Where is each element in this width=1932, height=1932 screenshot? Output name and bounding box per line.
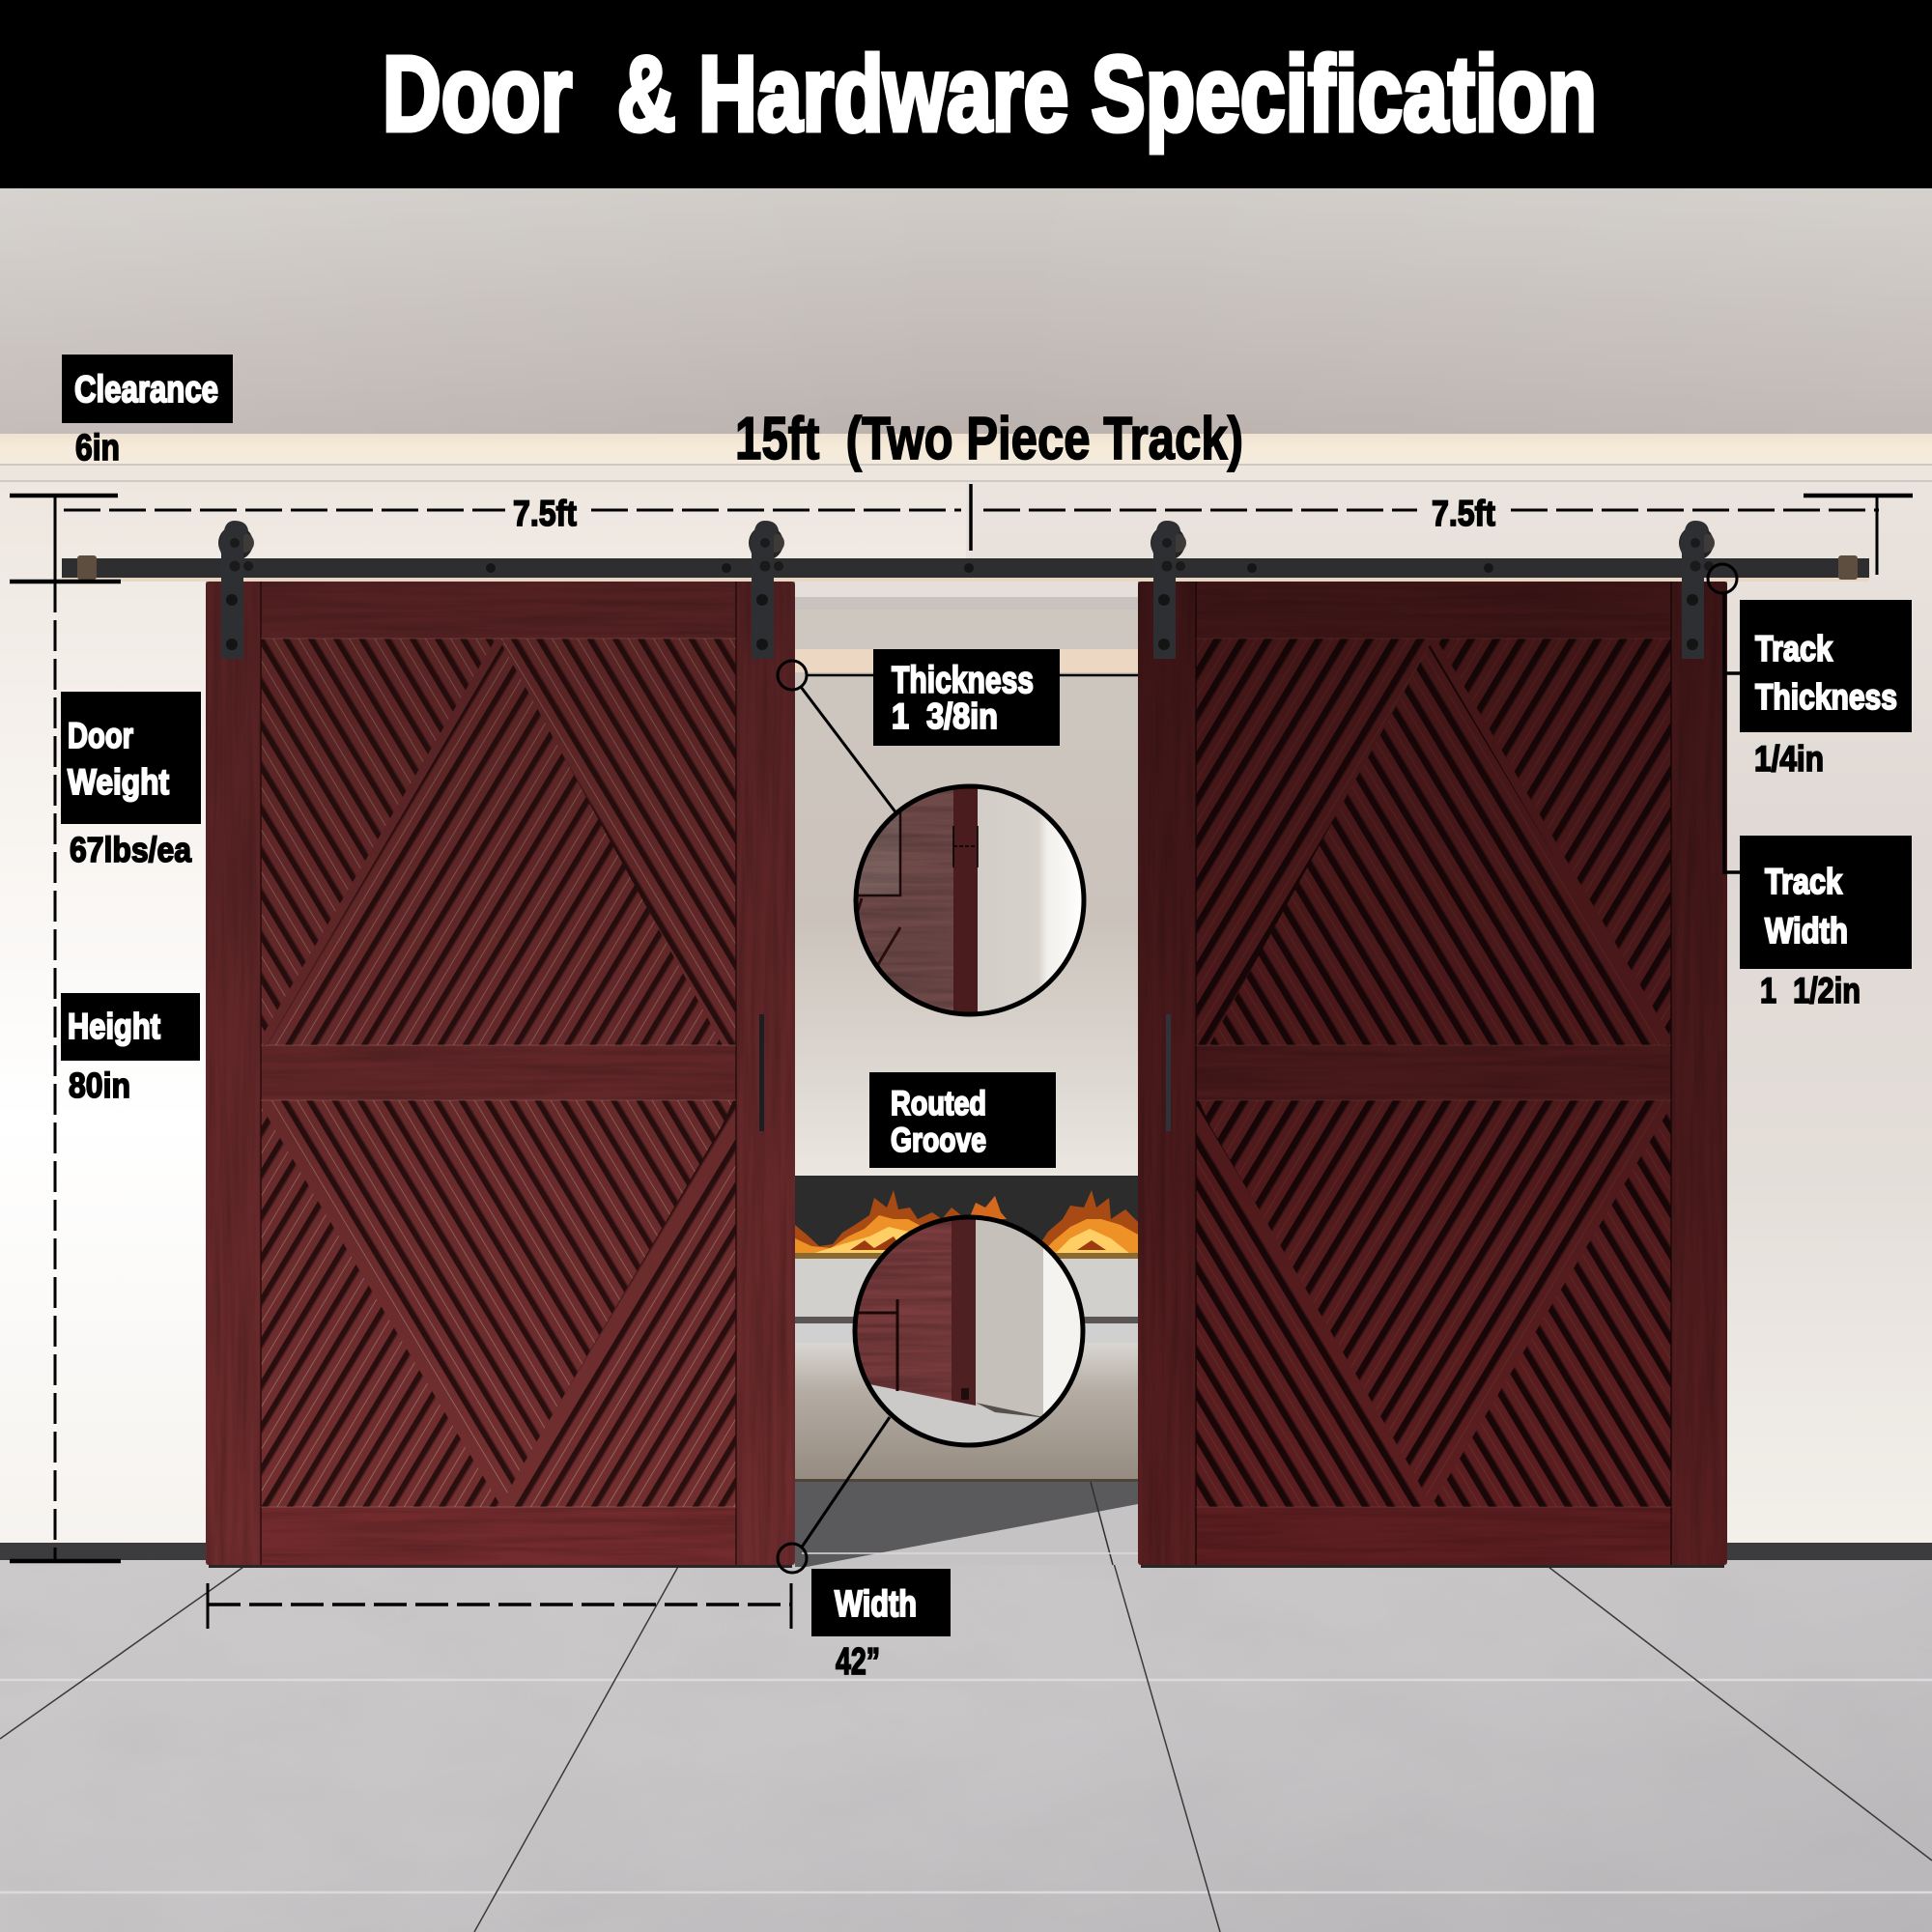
clearance label: Clearance xyxy=(74,369,218,411)
thickness label xyxy=(873,649,1060,746)
stiles xyxy=(206,582,795,1565)
track bolts xyxy=(486,563,1493,573)
clearance label: 6in xyxy=(75,428,120,469)
title bar xyxy=(0,0,1932,188)
track thickness label xyxy=(1740,600,1912,779)
fireplace band xyxy=(795,1176,1138,1259)
door width dimension xyxy=(208,1583,791,1629)
thickness label: 1 3/8in xyxy=(892,696,998,736)
door weight label: Door xyxy=(68,716,133,755)
door weight label: Weight xyxy=(68,762,169,802)
door weight label xyxy=(61,692,201,869)
width callout connector xyxy=(778,1417,890,1573)
track callout connector xyxy=(1708,564,1744,872)
title: Door & Hardware Specification xyxy=(383,35,1597,154)
width label xyxy=(811,1569,951,1683)
barn door track and hardware xyxy=(62,521,1869,659)
hangers xyxy=(218,521,1715,659)
thickness callout connector xyxy=(778,661,1138,813)
right barn door xyxy=(1138,582,1727,1568)
width label: Width xyxy=(835,1584,917,1625)
floor tile joints xyxy=(0,1483,1932,1932)
track stops xyxy=(77,555,1858,580)
track length heading: 15ft (Two Piece Track) xyxy=(735,406,1243,472)
opening between the doors xyxy=(795,578,1138,1567)
height label: 80in xyxy=(69,1065,130,1105)
left barn door xyxy=(206,582,795,1568)
lower slat panel xyxy=(1196,1100,1671,1507)
upper slat panel xyxy=(261,639,736,1045)
magnifier: routed groove detail xyxy=(855,1217,1083,1449)
track dimension lines: 7.5ft xyxy=(1432,494,1495,533)
track width label: 1 1/2in xyxy=(1760,971,1861,1010)
routed groove label xyxy=(869,1072,1056,1168)
routed groove label: Routed xyxy=(891,1085,986,1122)
height label xyxy=(61,993,200,1105)
lower slat panel xyxy=(261,1100,736,1507)
rails xyxy=(1196,582,1671,1565)
track dimension lines xyxy=(10,484,1913,1561)
track thickness label: Track xyxy=(1755,629,1833,668)
routed groove label: Groove xyxy=(891,1122,986,1159)
stiles xyxy=(1138,582,1727,1565)
width label: 42” xyxy=(836,1641,880,1683)
door handles xyxy=(759,1014,1171,1131)
flames xyxy=(795,1190,1138,1254)
clearance label xyxy=(62,355,233,469)
track width label: Track xyxy=(1765,862,1842,901)
height label: Height xyxy=(68,1007,160,1046)
door weight label: 67lbs/ea xyxy=(70,830,192,869)
upper slat panel xyxy=(1196,639,1671,1045)
track dimension lines: 7.5ft xyxy=(513,494,577,533)
thickness label: Thickness xyxy=(892,660,1034,701)
track thickness label: 1/4in xyxy=(1754,739,1824,779)
track width label: Width xyxy=(1765,911,1848,951)
track thickness label: Thickness xyxy=(1755,677,1897,717)
track width label xyxy=(1740,836,1912,1010)
rails xyxy=(261,582,736,1565)
magnifier: door thickness detail xyxy=(856,786,1084,1014)
